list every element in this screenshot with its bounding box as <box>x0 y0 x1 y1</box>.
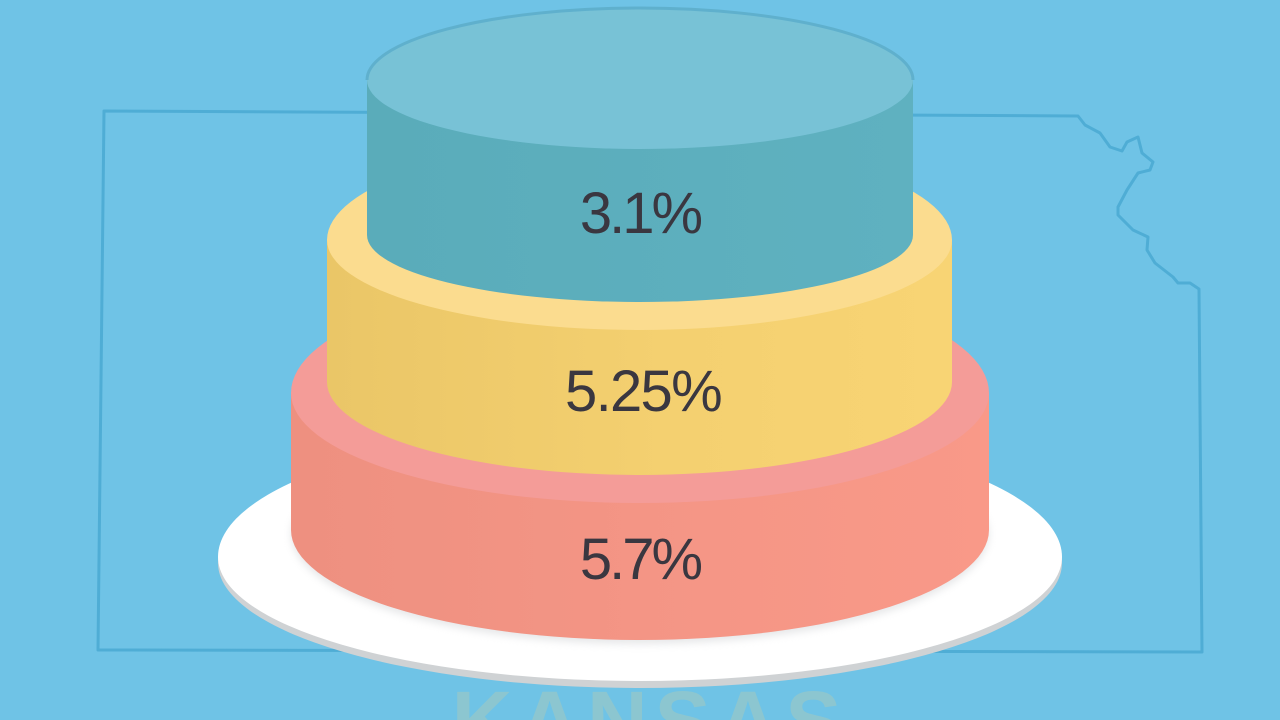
value: 5.25%: 5.25% <box>565 359 721 424</box>
bottom tier: 5.7% <box>291 275 989 640</box>
value: 3.1%: 3.1% <box>580 181 702 246</box>
plate <box>218 424 1062 688</box>
middle tier: 5.25% <box>327 140 952 475</box>
Kansas state outline <box>98 111 1202 652</box>
top tier: 3.1% <box>367 8 913 302</box>
value: 5.7%: 5.7% <box>580 527 702 592</box>
